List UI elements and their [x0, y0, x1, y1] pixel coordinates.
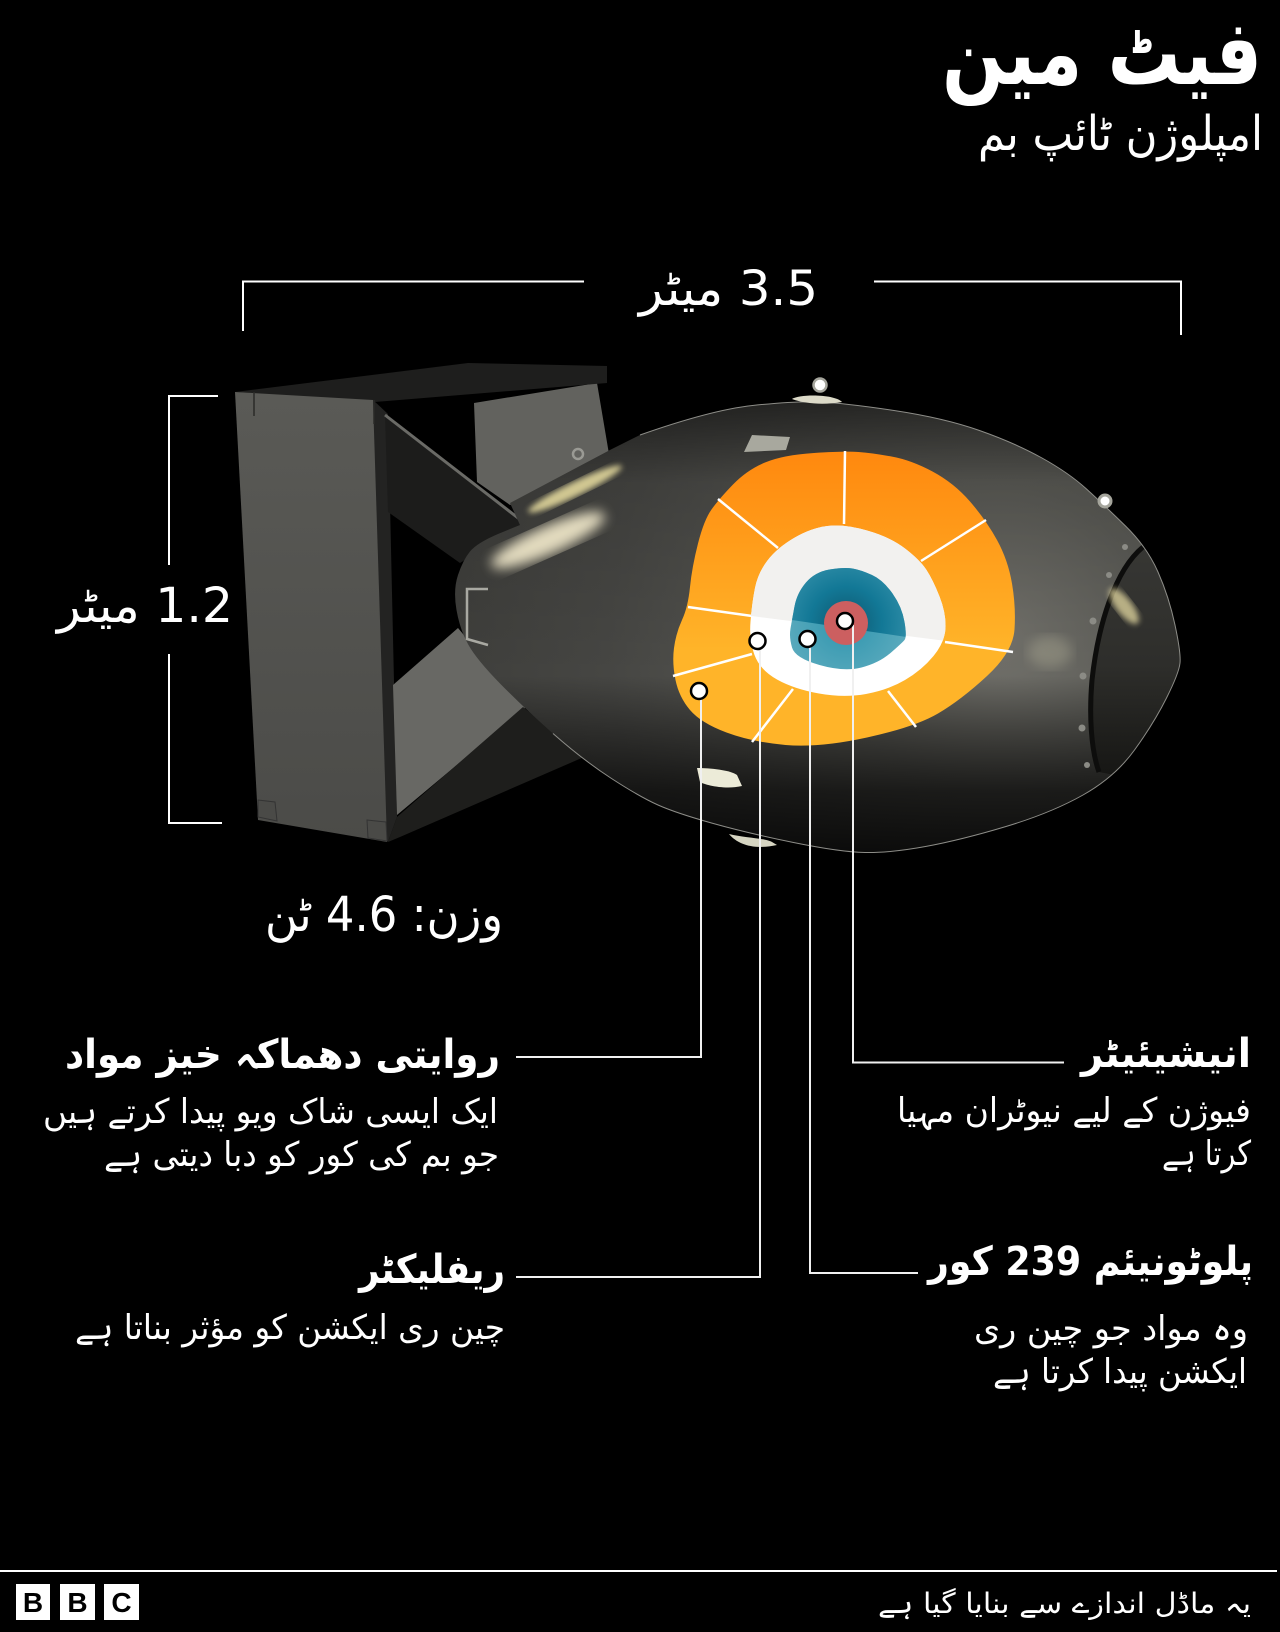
height bracket [169, 396, 222, 823]
tail assembly [235, 363, 610, 842]
cutaway: initiator [824, 601, 868, 645]
BBC logo: C [111, 1587, 132, 1618]
height label: 1.2 میٹر [55, 578, 233, 634]
callout: explosives text line 2: جو بم کی کور کو دبا دیتی ہے [104, 1135, 499, 1175]
footer rule [0, 1570, 1277, 1572]
BBC logo: B [67, 1587, 88, 1618]
marker dots [691, 613, 853, 699]
callout: explosives text line 1: ایک ایسی شاک ویو پیدا کرتے ہیں [43, 1092, 498, 1132]
callout: plutonium text line 2: ایکشن پیدا کرتا ہے [993, 1352, 1247, 1392]
cutaway: conventional explosives [673, 452, 1015, 746]
callout: plutonium text line 1: وہ مواد جو چین ری [974, 1309, 1248, 1349]
length bracket [243, 282, 1181, 335]
weight label: وزن: 4.6 ٹن [265, 887, 503, 943]
length label: 3.5 میٹر [637, 261, 818, 317]
leader lines [516, 625, 1064, 1277]
cutaway: plutonium core [790, 568, 906, 669]
BBC logo: B [23, 1587, 43, 1618]
callout: initiator heading: انیشیئیٹر [1079, 1031, 1251, 1077]
callout: initiator text line 1: فیوژن کے لیے نیوٹران مہیا [897, 1091, 1251, 1131]
callout: explosives heading: روایتی دھماکہ خیز مواد [65, 1032, 500, 1078]
BBC logo [16, 1584, 139, 1620]
bomb body [440, 395, 1190, 860]
footer note: یہ ماڈل اندازے سے بنایا گیا ہے [878, 1587, 1251, 1620]
callout: plutonium heading: پلوٹونیئم 239 کور [926, 1239, 1253, 1285]
cutaway: reflector [750, 526, 946, 696]
explosive lens dividers [673, 451, 1013, 742]
callout: reflector heading: ریفلیکٹر [357, 1247, 505, 1293]
bomb hardware [467, 378, 1128, 847]
callout: reflector text: چین ری ایکشن کو مؤثر بناتا ہے [75, 1308, 505, 1348]
callout: initiator text line 2: کرتا ہے [1162, 1134, 1252, 1174]
